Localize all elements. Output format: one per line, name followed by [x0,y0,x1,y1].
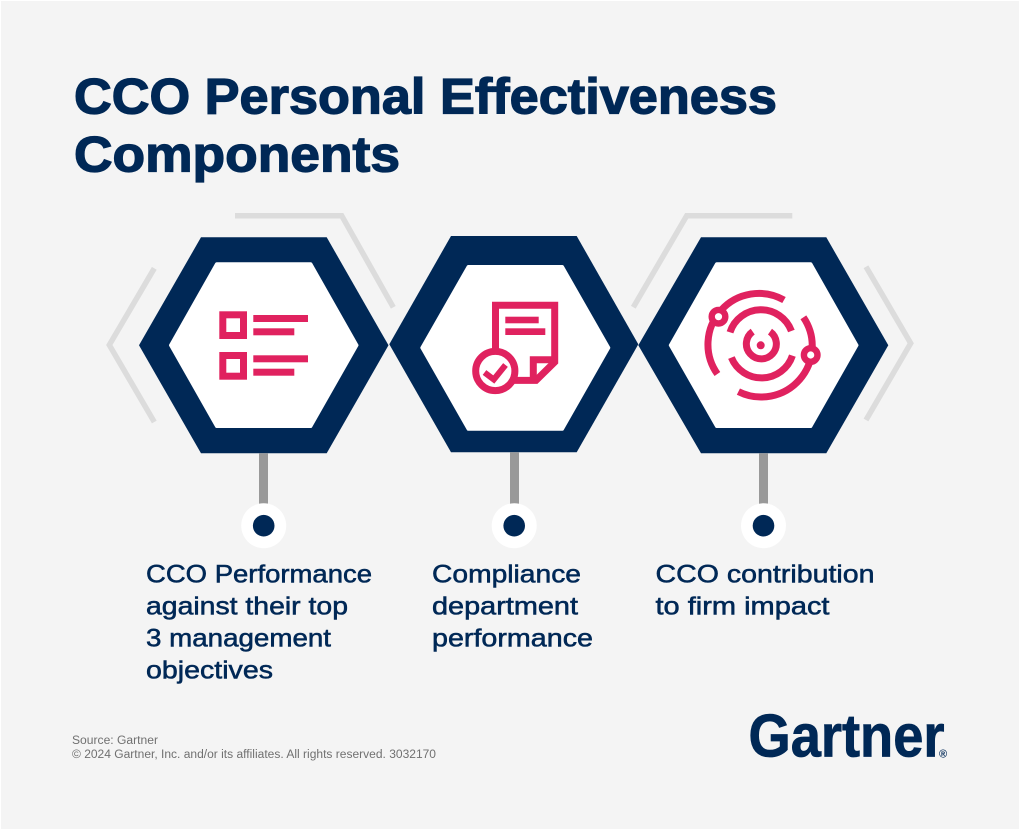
title: Components [74,126,400,182]
decorative outline: left chevron [109,268,154,422]
decorative outline: upper right of first hexagon [235,216,393,307]
connector: first hexagon to marker [241,453,286,548]
panel: department performance hexagon [389,236,638,452]
connector: third hexagon to marker [741,453,786,548]
text block: performance objectives label: against their top [146,592,348,620]
text block: department performance label: department [432,592,578,620]
text block: firm impact label: CCO contribution [656,560,874,588]
text block: performance objectives label: 3 management [146,624,331,652]
decorative outline: right chevron [866,267,911,420]
text block: performance objectives label: objectives [146,656,273,684]
Gartner logo: Gartner [748,703,944,770]
icon: concentric orbits [708,293,818,397]
text block: performance objectives label: CCO Performance [146,560,372,588]
source and copyright note: © 2024 Gartner, Inc. and/or its affiliates. All rights reserved. 3032170 [72,749,436,761]
text block: firm impact label: to firm impact [656,592,830,620]
title: CCO Personal Effectiveness [74,68,777,124]
connector: second hexagon to marker [492,452,537,548]
source and copyright note: Source: Gartner [72,735,158,747]
icon: checklist [223,315,308,376]
title [74,68,777,182]
icon: document with check badge [476,305,555,391]
text block: performance objectives label [146,560,372,684]
text block: department performance label: performance [432,624,593,652]
panel: firm impact hexagon [638,237,888,453]
text block: department performance label [432,560,593,652]
source and copyright note [72,735,436,761]
text block: department performance label: Compliance [432,560,581,588]
text block: firm impact label [656,560,874,620]
panel: performance objectives hexagon [139,237,388,453]
decorative outline: upper left of third hexagon [633,216,792,307]
Gartner logo: ® [939,748,947,760]
